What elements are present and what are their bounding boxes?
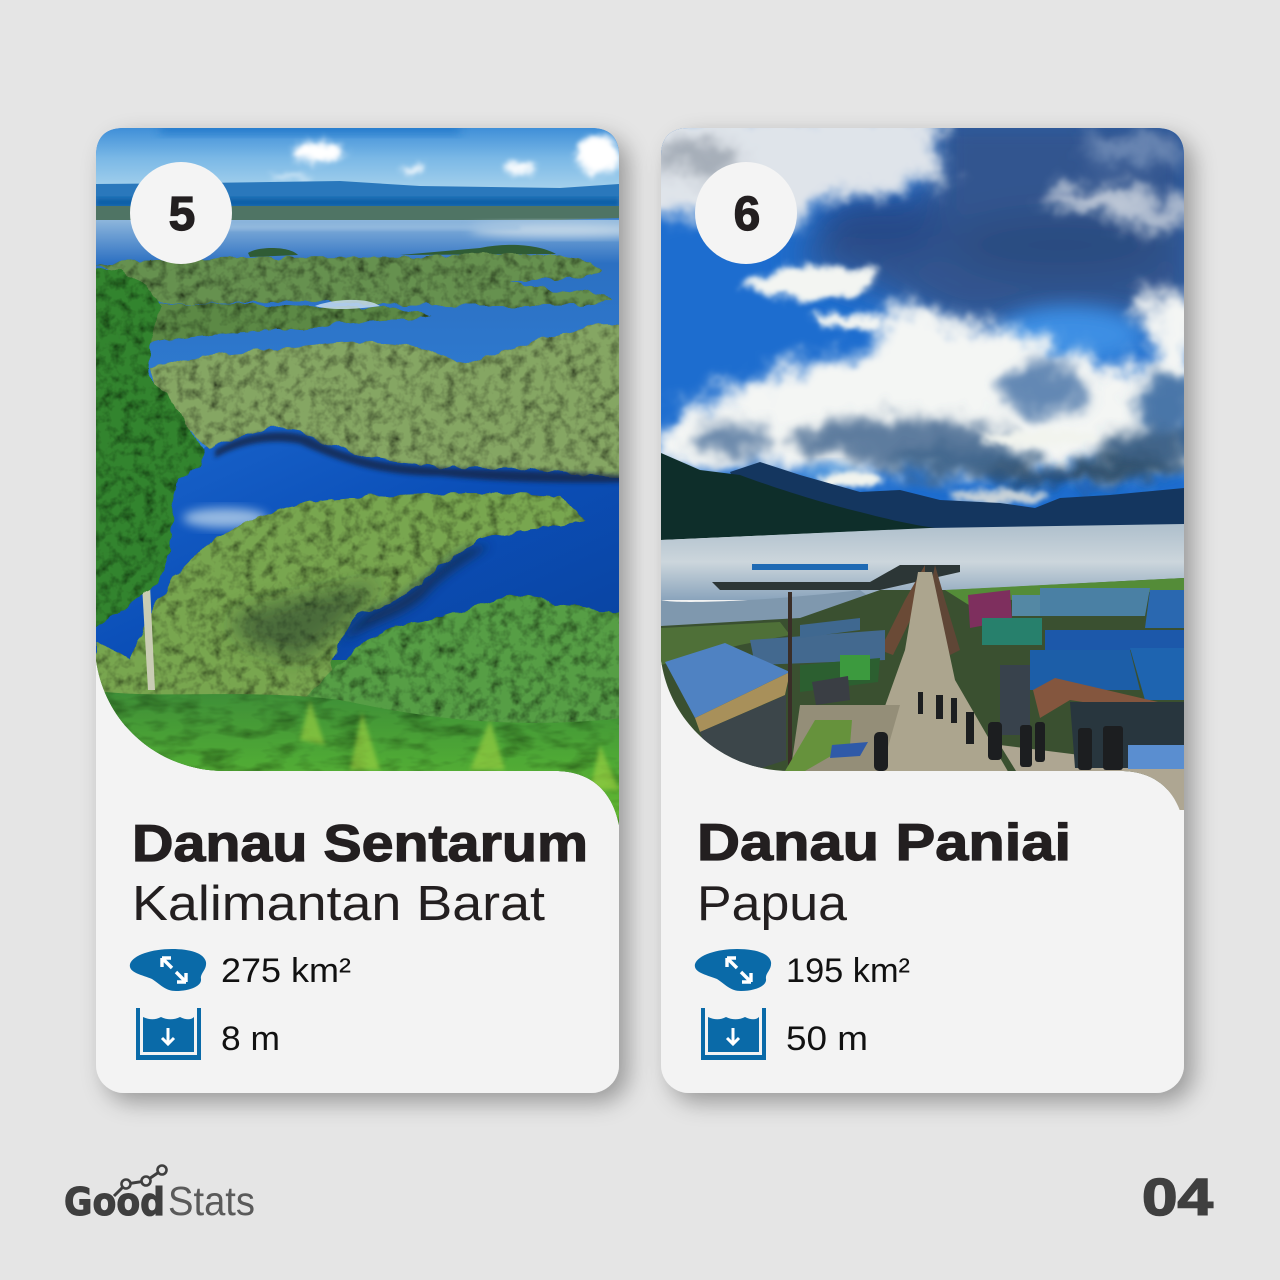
area value: 275 km² bbox=[221, 952, 351, 990]
location: Kalimantan Barat: Kalimantan Barat bbox=[132, 877, 545, 931]
deep blue lake bbox=[96, 410, 640, 660]
lake bbox=[661, 524, 1184, 600]
right buildings bbox=[968, 590, 1012, 628]
logo: GoodStats: Stats bbox=[168, 1178, 255, 1224]
sky patch bbox=[998, 307, 1142, 363]
page number: 04 bbox=[1142, 1169, 1213, 1227]
people bbox=[874, 692, 1123, 771]
icon: lake depth bbox=[701, 1008, 766, 1060]
islands, far bbox=[248, 245, 556, 257]
icon: lake depth bbox=[136, 1008, 201, 1060]
dark upper clouds bbox=[790, 110, 1200, 330]
main forest bbox=[150, 325, 650, 480]
left tree bbox=[96, 268, 205, 628]
logo: GoodStats bbox=[64, 1166, 255, 1224]
location: Papua: Papua bbox=[697, 877, 848, 931]
lower forest bbox=[96, 493, 585, 730]
depth value: 50 m bbox=[786, 1020, 868, 1058]
panel: Danau Sentarum card bbox=[80, 120, 650, 1093]
road bbox=[883, 572, 1008, 771]
shore and ground bbox=[661, 578, 1184, 790]
icon: lake area bbox=[695, 949, 771, 991]
depth value: 8 m bbox=[221, 1020, 280, 1058]
badge: number 5 bbox=[130, 162, 232, 264]
icon: lake area bbox=[130, 949, 206, 991]
dark cumulus shadows bbox=[688, 364, 1205, 483]
badge: number 6: 6 bbox=[734, 188, 760, 241]
white cumulus bbox=[740, 265, 880, 330]
light clouds upper bbox=[640, 110, 1205, 229]
left buildings bbox=[750, 630, 885, 665]
panel: Danau Paniai card bbox=[640, 110, 1205, 1093]
area value: 195 km² bbox=[786, 952, 910, 990]
title: Danau Sentarum: Danau Sentarum bbox=[132, 815, 588, 873]
market strips beside road bbox=[885, 565, 925, 655]
mountains bbox=[730, 462, 1184, 530]
logo: GoodStats: Good bbox=[64, 1180, 165, 1224]
badge: number 6 bbox=[695, 162, 797, 264]
photo: Danau Paniai village and lake bbox=[640, 110, 1205, 810]
badge: number 5: 5 bbox=[169, 188, 195, 241]
photo: Danau Sentarum lake landscape bbox=[80, 120, 650, 830]
title: Danau Paniai: Danau Paniai bbox=[697, 814, 1071, 872]
foreground trees and ferns bbox=[90, 595, 650, 800]
pier bbox=[752, 564, 868, 570]
